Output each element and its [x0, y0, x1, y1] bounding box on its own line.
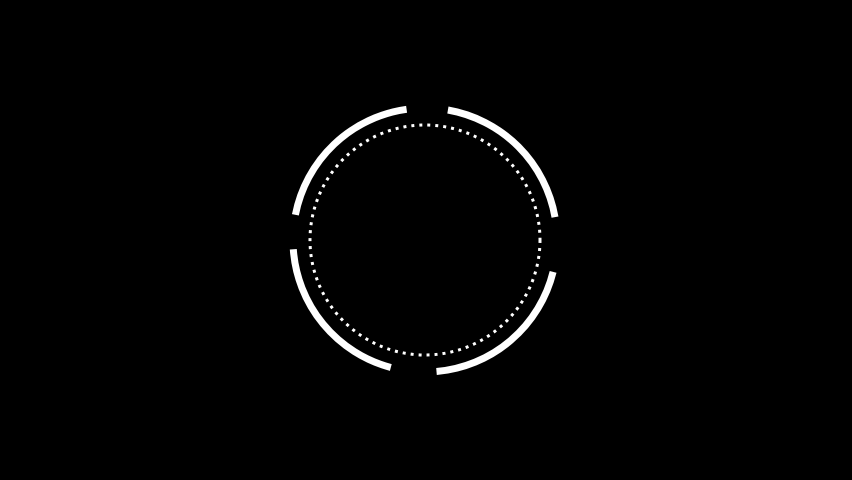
arc: bottom-right — [436, 272, 553, 372]
arc: bottom-left — [293, 249, 391, 368]
arc: top-left — [295, 109, 407, 215]
outer segmented ring — [293, 109, 555, 372]
dotted inner circle — [310, 125, 540, 355]
arc: top-right — [448, 110, 555, 217]
